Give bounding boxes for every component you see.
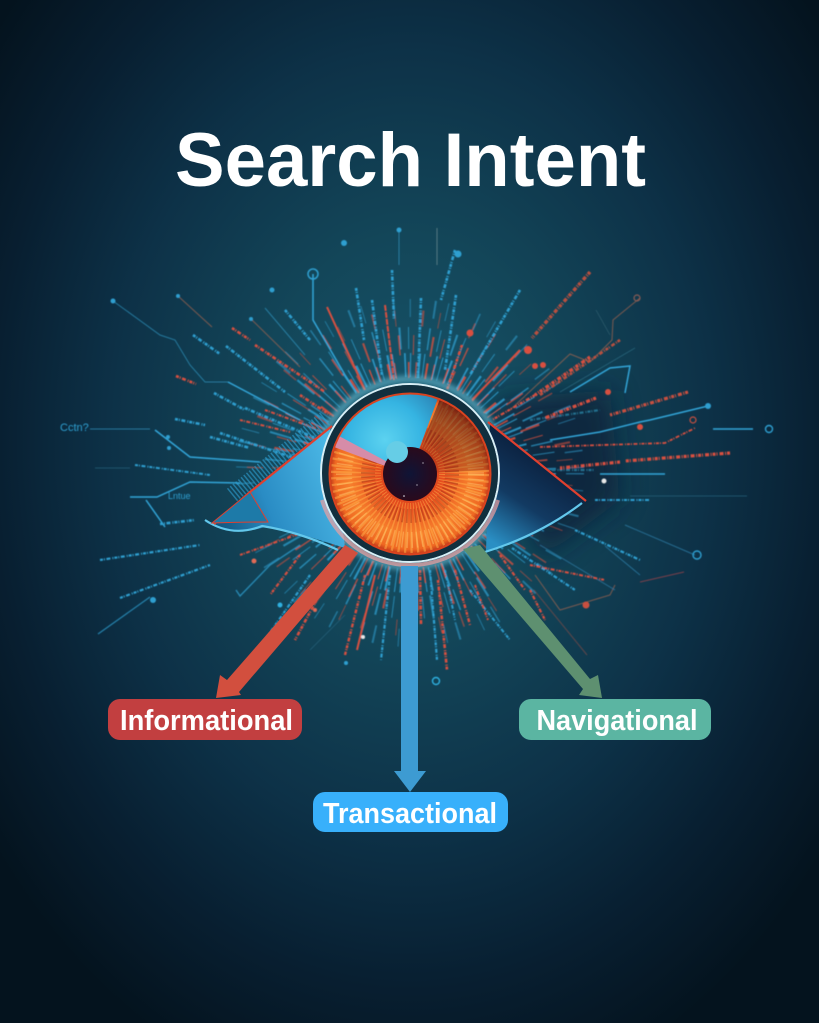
title: Search Intent (175, 118, 646, 203)
lower lid highlights (205, 503, 582, 552)
bottom pink rim glow (322, 500, 498, 565)
ray label: Cctn?: Cctn? (60, 422, 89, 434)
pink reflection band (334, 436, 410, 474)
arrow: informational (216, 545, 358, 698)
right sclera (486, 422, 585, 552)
dense radial fringe: blue (245, 308, 575, 638)
rays: bright blue traces (130, 274, 753, 527)
iris dark upper right shade (410, 399, 490, 474)
data rays radiating from the eye (60, 228, 772, 684)
white outer ring (321, 384, 499, 562)
eye (205, 379, 586, 567)
iris (329, 393, 491, 555)
dark patch behind the right rays (490, 390, 620, 560)
rays: red data dashes (176, 272, 730, 670)
rays: blue data dashes (100, 250, 650, 660)
arrow: navigational (463, 545, 602, 698)
ray label: Lntue: Lntue (168, 491, 191, 501)
dense radial fringe: red (255, 318, 565, 628)
ray end nodes (110, 228, 772, 684)
rays: thin circuit traces (90, 228, 747, 655)
left sclera (205, 428, 345, 548)
dotted halo above left lid (232, 418, 326, 495)
label: navigational: Navigational (536, 705, 698, 737)
iris fibres (344, 408, 476, 540)
highlight (386, 441, 408, 463)
dark ring (325, 388, 495, 558)
eye glow (316, 379, 504, 567)
label: informational: Informational (120, 705, 293, 737)
tear duct (212, 492, 268, 523)
label: transactional: Transactional (323, 798, 497, 830)
iris blue reflection wedge (338, 393, 438, 474)
pupil sparkles (403, 462, 424, 497)
upper lid red outline (214, 422, 586, 524)
red iris rim (330, 394, 490, 554)
arrow: transactional (394, 566, 426, 792)
pupil (383, 447, 437, 501)
